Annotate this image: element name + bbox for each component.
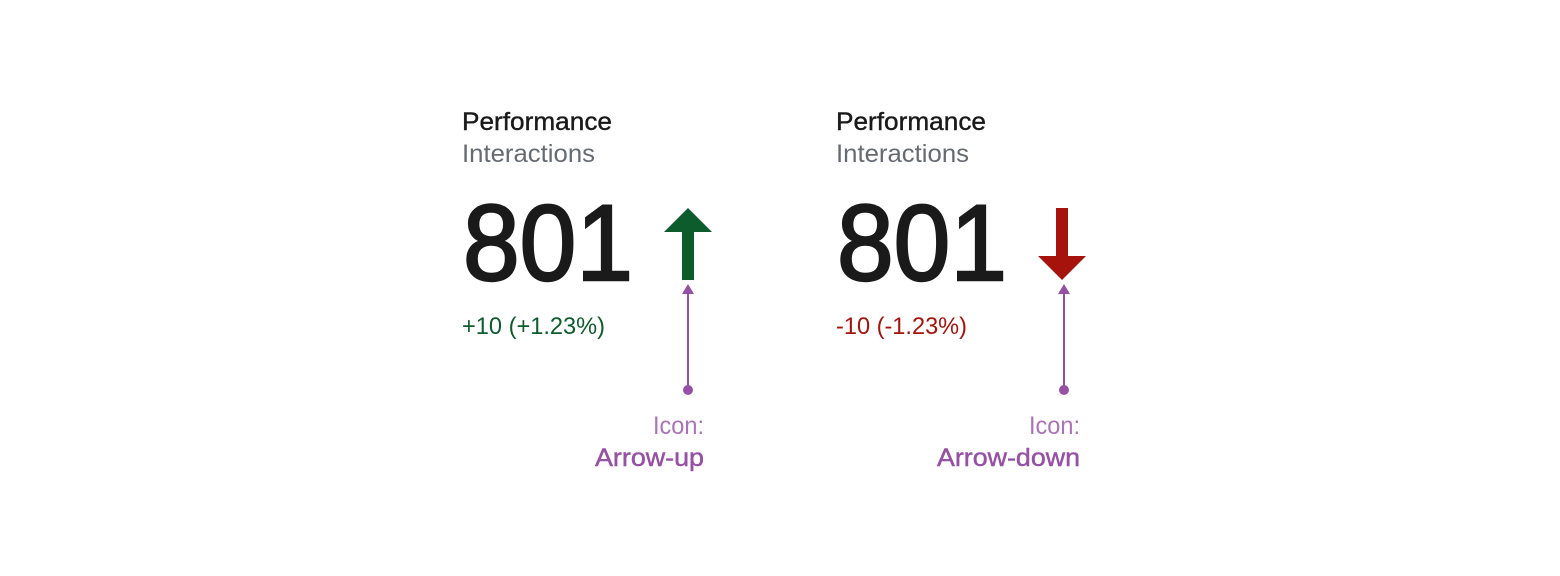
icon: red down arrow xyxy=(1038,208,1086,280)
annotation label: Icon: Icon: xyxy=(653,412,704,440)
big number: 801 xyxy=(463,182,633,303)
icon: green up arrow xyxy=(664,208,712,280)
annotation label: Arrow-up: Arrow-up xyxy=(595,444,704,472)
panel: arrow-up KPI xyxy=(462,108,712,472)
big number: 801 xyxy=(837,182,1007,303)
annotation label: Icon: Icon: xyxy=(1029,412,1080,440)
annotation pointer: up arrow xyxy=(682,284,694,395)
annotation label: Arrow-down: Arrow-down xyxy=(937,444,1080,472)
change value: +10 (+1.23%) xyxy=(462,313,605,340)
subheading: Interactions: Interactions xyxy=(462,140,595,168)
annotation pointer: down arrow xyxy=(1058,284,1070,395)
heading: Performance: Performance xyxy=(836,108,986,136)
subheading: Interactions: Interactions xyxy=(836,140,969,168)
heading: Performance: Performance xyxy=(462,108,612,136)
panel: arrow-down KPI xyxy=(836,108,1086,472)
change value: -10 (-1.23%) xyxy=(836,313,967,340)
